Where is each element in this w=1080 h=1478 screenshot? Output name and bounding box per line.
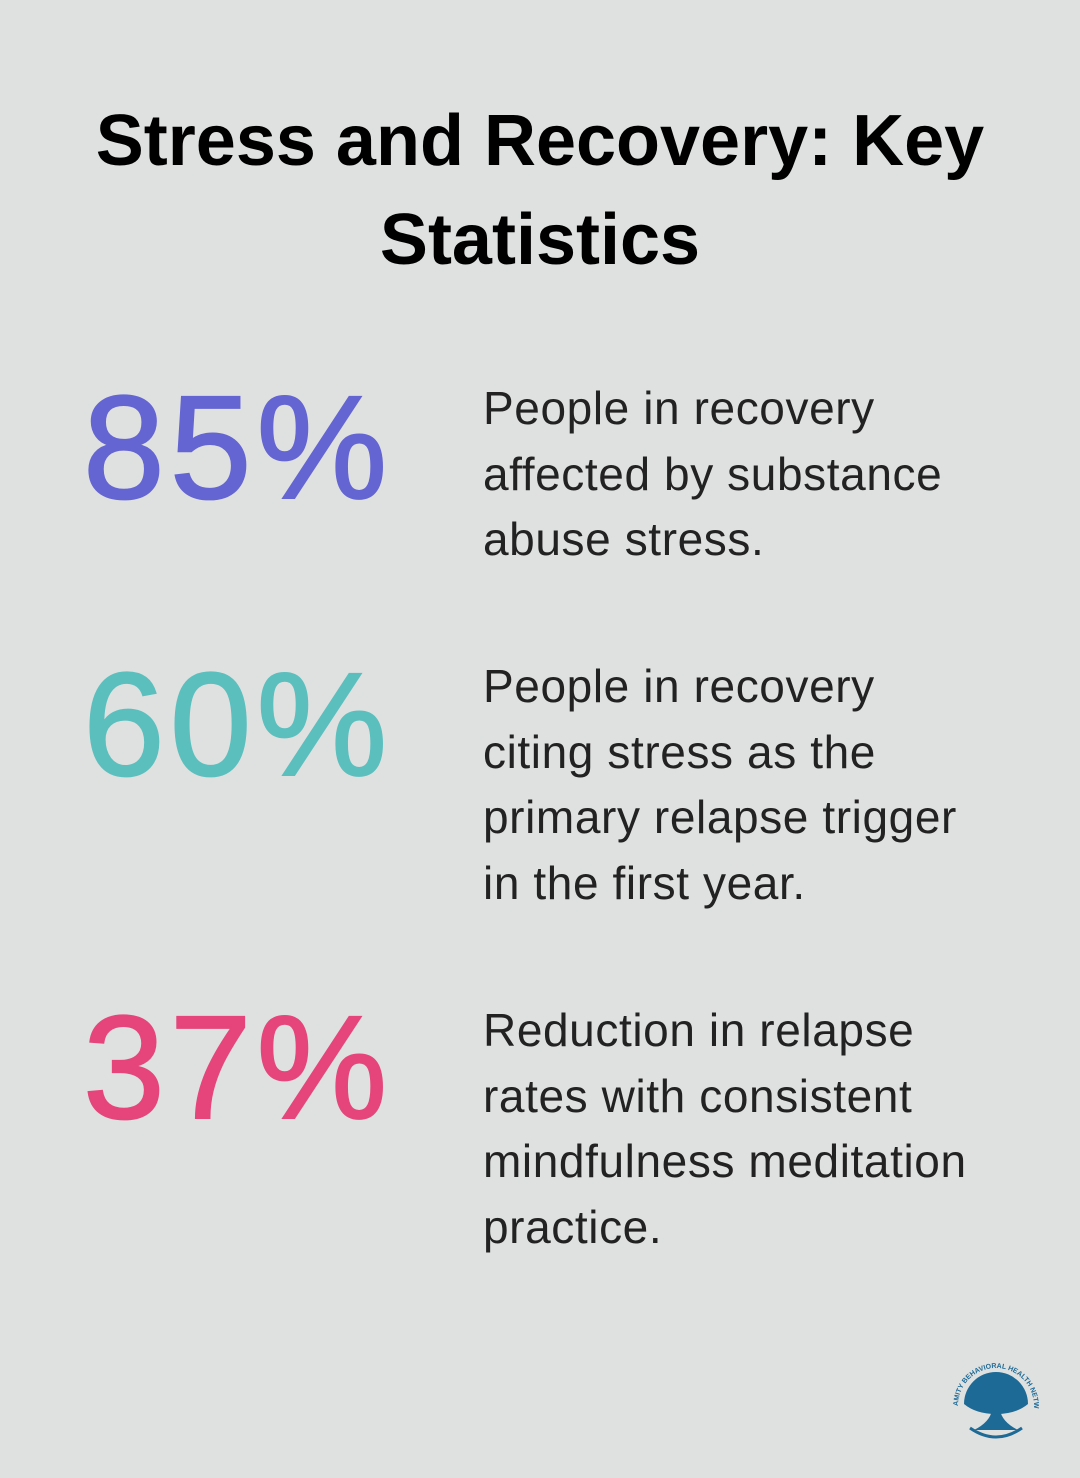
stat 3 text: practice.	[483, 1200, 662, 1252]
stat 3 text: rates with consistent	[483, 1070, 912, 1122]
stat 2 text: primary relapse trigger	[483, 791, 957, 843]
stat 1 text: abuse stress.	[483, 513, 764, 565]
stat 1 text: People in recovery	[483, 382, 875, 434]
logo	[953, 1363, 1039, 1438]
title: Statistics	[380, 200, 700, 280]
stat 3 text	[483, 1004, 967, 1252]
stat 2 text: People in recovery	[483, 660, 875, 712]
stat 3 text: Reduction in relapse	[483, 1004, 914, 1056]
stat 3 number: 37%	[83, 986, 392, 1150]
stat 2 text	[483, 660, 957, 908]
stat 3 text: mindfulness meditation	[483, 1135, 967, 1187]
title: Stress and Recovery: Key	[96, 101, 984, 181]
stat 2 text: in the first year.	[483, 856, 806, 908]
stat 1 text: affected by substance	[483, 448, 942, 500]
title	[96, 101, 984, 280]
stat 1 number: 85%	[83, 366, 392, 530]
stat 1 text	[483, 382, 942, 565]
stat 2 text: citing stress as the	[483, 726, 876, 778]
stat 2 number: 60%	[83, 643, 392, 807]
